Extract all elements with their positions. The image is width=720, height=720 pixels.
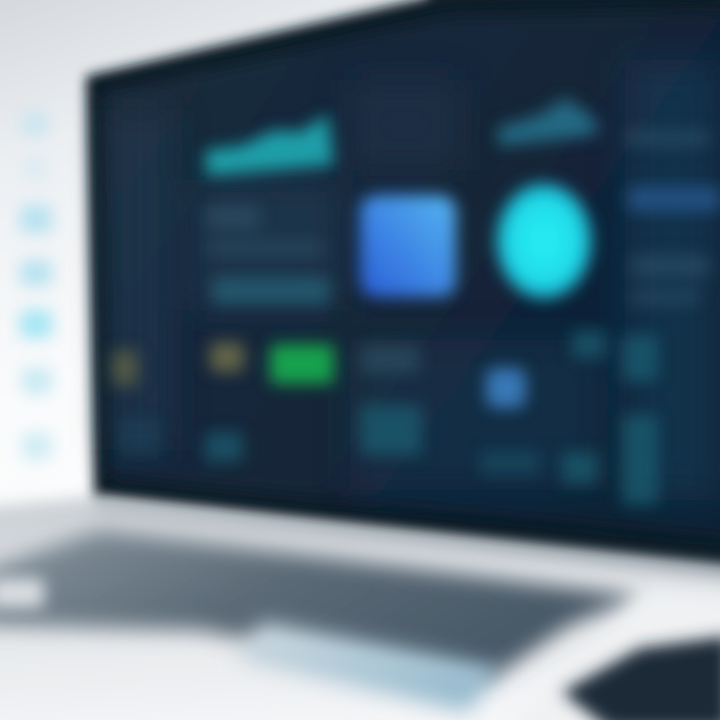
phone surround <box>505 592 720 720</box>
screen <box>104 10 720 540</box>
lower teal blocks <box>118 330 658 505</box>
top camera shadow <box>430 0 720 10</box>
silver lip <box>96 500 720 582</box>
green tile <box>270 344 334 384</box>
trackpad <box>236 622 500 712</box>
phone <box>562 636 720 720</box>
blue square <box>360 195 456 297</box>
line chart right <box>497 98 597 146</box>
mid teal bar <box>212 278 330 304</box>
keyboard <box>0 530 640 680</box>
left key highlight <box>0 578 44 608</box>
side icon column <box>20 112 52 460</box>
line chart left <box>205 114 334 176</box>
small text blocks <box>205 130 710 373</box>
screen bezel <box>86 0 720 572</box>
blue dot <box>486 368 526 408</box>
dashboard panels <box>110 60 720 500</box>
laptop base <box>0 496 720 720</box>
cyan circle <box>496 183 592 299</box>
right blue bar <box>628 186 720 212</box>
amber tiles <box>112 342 244 386</box>
